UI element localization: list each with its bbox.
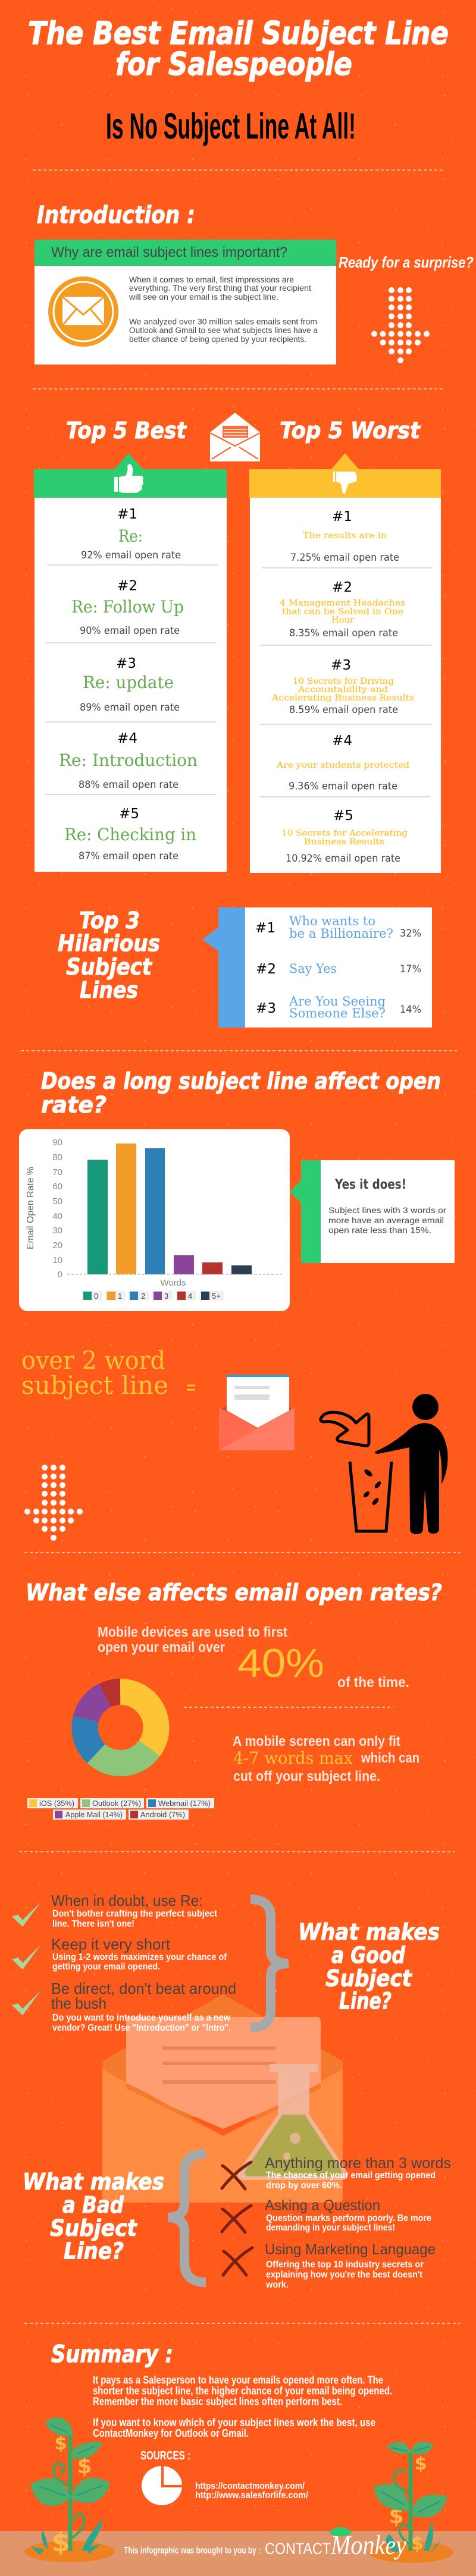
entry 5: 87% email open rate: [79, 850, 178, 862]
legend: email clients: [27, 1798, 214, 1820]
text: mobile screen: 4-7 words max: [233, 1748, 353, 1768]
entry 2: Re: Follow Up: [71, 597, 184, 617]
entry 4: Are your students protected: [276, 761, 409, 770]
entry 5: 10 Secrets for Accelerating: [281, 829, 408, 838]
item 1: [12, 1892, 218, 1929]
item 3: Do you want to introduce yourself as a new: [52, 2013, 231, 2023]
entry 5: #5: [333, 808, 353, 824]
entry 2: #2: [117, 578, 137, 593]
text: over 2 word subject line: over 2 word: [21, 1346, 165, 1375]
logo: contactmonkey: Monkey: [330, 2530, 407, 2560]
heading: what makes a good subject line: Line?: [339, 1988, 392, 2014]
intro text: everything. The very first thing that your recipient: [129, 283, 311, 293]
footer band: [0, 2531, 476, 2576]
entry 4: 88% email open rate: [79, 779, 178, 791]
entry 5: 10.92% email open rate: [286, 853, 400, 865]
callout: yes it does: Yes it does!: [334, 1177, 406, 1192]
item 2: Using 1-2 words maximizes your chance of: [52, 1952, 227, 1962]
callout: yes it does: Subject lines with 3 words or: [328, 1205, 446, 1215]
panel heading: Why are email subject lines important?: [51, 244, 287, 260]
row 3: [256, 994, 421, 1020]
y axis labels: 40: [52, 1211, 62, 1221]
heading: top 5 worst: Top 5 Worst: [280, 417, 421, 444]
title: [28, 15, 449, 83]
entry 1: 7.25% email open rate: [290, 552, 399, 564]
item 3: work.: [265, 2280, 289, 2290]
summary text: Remember the more basic subject lines often perform best.: [93, 2395, 342, 2407]
y axis labels: [52, 1138, 62, 1280]
heading: what makes a good subject line: a Good: [331, 1942, 406, 1968]
heading: long subject line: rate?: [41, 1092, 107, 1118]
intro text: Outlook and Gmail to see what subjects lines have a: [129, 325, 318, 335]
item 2: Question marks perform poorly. Be more: [266, 2213, 431, 2223]
heading: what makes a bad subject line: Line?: [64, 2238, 124, 2264]
item 2: Asking a Question: [265, 2197, 380, 2214]
entry 1: #1: [117, 507, 137, 522]
entry 5: Business Results: [304, 837, 384, 847]
legend: email clients: Apple Mail (14%): [65, 1810, 123, 1819]
background illustration: envelope and flask: [102, 1994, 347, 2203]
heading: top 5 best: Top 5 Best: [66, 417, 187, 444]
entry 5: #5: [119, 806, 139, 822]
legend: email clients: Webmail (17%): [158, 1799, 211, 1808]
row 1: [255, 914, 421, 941]
illustration: right money plant: [369, 2442, 453, 2563]
row 2: #2: [256, 962, 276, 977]
item 2: [222, 2197, 431, 2233]
item 3: vendor? Great! Use "Introduction" or "Intro".: [52, 2023, 231, 2033]
row 1: #1: [255, 921, 275, 936]
illustration: right money plant: $: [411, 2533, 423, 2554]
footer credit: [124, 2527, 407, 2560]
brace: good: [250, 1899, 289, 2028]
bar chart: [19, 1129, 290, 1311]
item 3: [12, 1980, 236, 2033]
item 1: When in doubt, use Re:: [51, 1892, 203, 1909]
y axis labels: 20: [52, 1240, 62, 1251]
brace: bad: [168, 2154, 206, 2282]
arrow: dotted down arrow 2: [24, 1465, 83, 1541]
legend: 5+: [212, 1292, 221, 1300]
sources: SOURCES :: [140, 2449, 190, 2462]
legend: 0: [94, 1292, 98, 1300]
heading: summary: Summary :: [51, 2341, 173, 2368]
entry 5: Re: Checking in: [64, 825, 196, 844]
text: mobile screen: [233, 1733, 419, 1785]
item 1: Anything more than 3 words: [265, 2155, 451, 2172]
heading: introduction: Introduction :: [37, 202, 195, 229]
bars: [87, 1144, 252, 1274]
summary text: ContactMonkey for Outlook or Gmail.: [93, 2427, 249, 2439]
heading: top 3 hilarious subject lines: Hilarious: [58, 930, 160, 956]
entry 4: [59, 731, 198, 791]
y axis labels: 60: [52, 1182, 62, 1192]
heading: what makes a good subject line: Subject: [325, 1965, 413, 1991]
text: over 2 word subject line: =: [186, 1375, 196, 1400]
legend: [82, 1291, 224, 1300]
legend: 4: [188, 1292, 192, 1300]
item 3: [223, 2241, 436, 2290]
intro text: We analyzed over 30 million sales emails sent from: [129, 316, 317, 326]
entry 3: [271, 658, 414, 716]
intro text: [129, 275, 318, 344]
legend: email clients: Outlook (27%): [92, 1799, 141, 1808]
stat: 40%: 40%: [237, 1641, 324, 1686]
item 2: Keep it very short: [51, 1935, 171, 1953]
callout: yes it does: open rate less than 15%.: [328, 1225, 431, 1234]
entry 3: Re: update: [83, 673, 174, 692]
row 1: 32%: [400, 928, 421, 940]
entry 2: #2: [332, 580, 352, 595]
entry 2: 4 Management Headaches: [280, 598, 405, 608]
intro text: When it comes to email, first impressions are: [129, 275, 294, 284]
entry 1: Re:: [118, 526, 143, 546]
entry 4: #4: [117, 731, 137, 746]
item 1: line. There isn't one!: [52, 1919, 134, 1929]
heading: what makes a bad subject line: Subject: [50, 2215, 138, 2241]
item 2: demanding in your subject lines!: [266, 2223, 395, 2233]
entry 3: Accelerating Business Results: [271, 693, 414, 703]
list: good subject lines: [12, 1892, 236, 2033]
row 3: Someone Else?: [289, 1006, 386, 1020]
row 2: Say Yes: [289, 962, 337, 976]
x axis title: Words: [160, 1278, 186, 1288]
entry 3: #3: [331, 658, 351, 673]
text: mobile devices: [98, 1625, 409, 1691]
entry 4: #4: [332, 733, 352, 749]
text: mobile devices: of the time.: [337, 1675, 409, 1691]
text: mobile screen: cut off your subject line.: [233, 1768, 380, 1785]
y axis title: Email Open Rate %: [26, 1167, 36, 1249]
entry 3: Accountability and: [298, 685, 388, 695]
heading: top 3 hilarious subject lines: Lines: [80, 977, 138, 1003]
entry 1: #1: [332, 509, 352, 524]
entry 3: #3: [116, 656, 136, 671]
text: mobile screen: which can: [361, 1750, 419, 1766]
legend: 1: [118, 1292, 122, 1300]
y axis labels: 0: [58, 1270, 62, 1280]
heading: what makes a bad subject line: [23, 2169, 164, 2264]
item 3: Offering the top 10 industry secrets or: [266, 2260, 424, 2270]
callout: yes it does: [290, 1160, 455, 1263]
entry 3: [80, 656, 180, 714]
entry 4: [276, 733, 409, 792]
icon: open envelope with letter: [219, 1375, 295, 1450]
entry 1: [290, 509, 399, 564]
item 1: The chances of your email getting opened: [266, 2170, 436, 2181]
intro text: will see on your email is the subject line.: [129, 292, 278, 301]
item 3: Using Marketing Language: [265, 2241, 436, 2258]
illustration: left money plant: [24, 2417, 115, 2562]
item 2: getting your email opened.: [52, 1962, 160, 1972]
text: over 2 word subject line: subject line: [21, 1371, 168, 1400]
heading: top 3 hilarious subject lines: Subject: [66, 954, 153, 980]
row 3: #3: [256, 1001, 276, 1016]
heading: top 3 hilarious subject lines: Top 3: [79, 907, 140, 934]
item 1: Don't bother crafting the perfect subject: [52, 1909, 218, 1919]
heading: top 3 hilarious subject lines: [58, 907, 160, 1003]
heading: what makes a good subject line: What makes: [298, 1919, 440, 1945]
text: mobile devices: open your email over: [98, 1639, 225, 1655]
legend: email clients: Android (7%): [140, 1810, 185, 1819]
icon: thumbs up: [114, 464, 143, 493]
entry 2: [280, 580, 405, 639]
heading: long subject line: [41, 1068, 441, 1118]
legend: email clients: iOS (35%): [39, 1799, 74, 1808]
y axis labels: 70: [52, 1167, 62, 1177]
icon: open envelope: [210, 413, 260, 461]
icon: thumbs down: [333, 472, 357, 494]
item 1: drop by over 60%.: [266, 2181, 342, 2191]
row 1: Who wants to: [289, 914, 375, 928]
panel: why subject lines are important: [35, 240, 336, 365]
entry 5: [281, 808, 408, 865]
heading: what else affects email open rates: What else affects email open rates?: [26, 1579, 442, 1606]
heading: what makes a bad subject line: What makes: [23, 2169, 164, 2195]
summary text: [93, 2374, 392, 2439]
y axis labels: 90: [52, 1138, 62, 1148]
footer credit: This infographic was brought to you by :: [124, 2546, 261, 2556]
entry 3: 10 Secrets for Driving: [293, 677, 394, 686]
item 3: Be direct, don't beat around: [51, 1980, 236, 1997]
row 1: be a Billionaire?: [289, 926, 393, 941]
illustration: right money plant: $: [389, 2504, 404, 2528]
text: mobile devices: Mobile devices are used to first: [98, 1625, 287, 1640]
sources: [140, 2449, 308, 2505]
summary text: shorter the subject line, the higher chance of your email being opened.: [93, 2385, 392, 2396]
list: bad subject lines: [222, 2155, 451, 2290]
arrow: dotted down arrow: [371, 287, 430, 363]
callout: yes it does: more have an average email: [328, 1215, 444, 1225]
illustration: left money plant: $: [55, 2433, 67, 2454]
intro text: better chance of being opened by your recipients.: [129, 334, 306, 344]
entry 2: that can be Solved in One: [282, 607, 403, 617]
entry 4: 9.36% email open rate: [289, 780, 397, 792]
legend: 3: [164, 1292, 168, 1300]
entry 5: [64, 806, 196, 862]
panel: top 5 best: [34, 453, 227, 872]
panel: top 5 worst: [249, 453, 441, 873]
icon: envelope in circle: [48, 277, 118, 347]
y axis labels: 30: [52, 1226, 62, 1236]
row 3: 14%: [400, 1004, 421, 1016]
item 1: [222, 2155, 451, 2191]
panel: hilarious subject lines: [202, 907, 432, 1028]
text: mobile screen: A mobile screen can only fit: [233, 1733, 400, 1749]
donut chart: [84, 1692, 156, 1763]
row 2: 17%: [400, 963, 421, 975]
illustration: left money plant: $: [77, 2454, 92, 2478]
entry 4: Re: Introduction: [59, 750, 198, 770]
logo: contactmonkey: CONTACT: [265, 2540, 331, 2558]
text: over 2 word subject line: [21, 1346, 196, 1400]
row 2: [256, 962, 421, 977]
icon: person throwing into trash: [321, 1394, 448, 1534]
row 3: Are You Seeing: [289, 994, 386, 1009]
summary text: It pays as a Salesperson to have your emails opened more often. The: [93, 2374, 383, 2386]
title: for Salespeople: [115, 46, 352, 83]
legend: 2: [141, 1292, 145, 1300]
item 2: [12, 1935, 227, 1972]
entry 2: 8.35% email open rate: [289, 627, 398, 639]
y axis labels: 10: [52, 1255, 62, 1265]
logo: contactmonkey: [265, 2527, 407, 2560]
icon: pie chart: [142, 2465, 183, 2505]
item 3: the bush: [51, 1994, 107, 2012]
sources: http://www.salesforlife.com/: [195, 2490, 308, 2500]
illustration: right money plant: $: [415, 2454, 427, 2474]
entry 2: 90% email open rate: [80, 625, 180, 637]
item 3: explaining how you're the best doesn't: [266, 2270, 423, 2280]
summary text: If you want to know which of your subject lines work the best, use: [93, 2417, 375, 2429]
entry 1: 92% email open rate: [81, 549, 181, 561]
entry 3: 8.59% email open rate: [289, 704, 398, 716]
y axis labels: 50: [52, 1196, 62, 1207]
y axis labels: 80: [52, 1152, 62, 1163]
entry 2: Hour: [331, 615, 354, 625]
entry 2: [71, 578, 184, 637]
illustration: left money plant: $: [52, 2527, 70, 2558]
entry 1: The results are in: [303, 531, 387, 541]
entry 1: [81, 507, 181, 561]
sources: https://contactmonkey.com/: [195, 2481, 305, 2492]
heading: what makes a good subject line: [298, 1919, 440, 2014]
entry 3: 89% email open rate: [80, 702, 180, 714]
heading: what makes a bad subject line: a Bad: [62, 2192, 124, 2218]
